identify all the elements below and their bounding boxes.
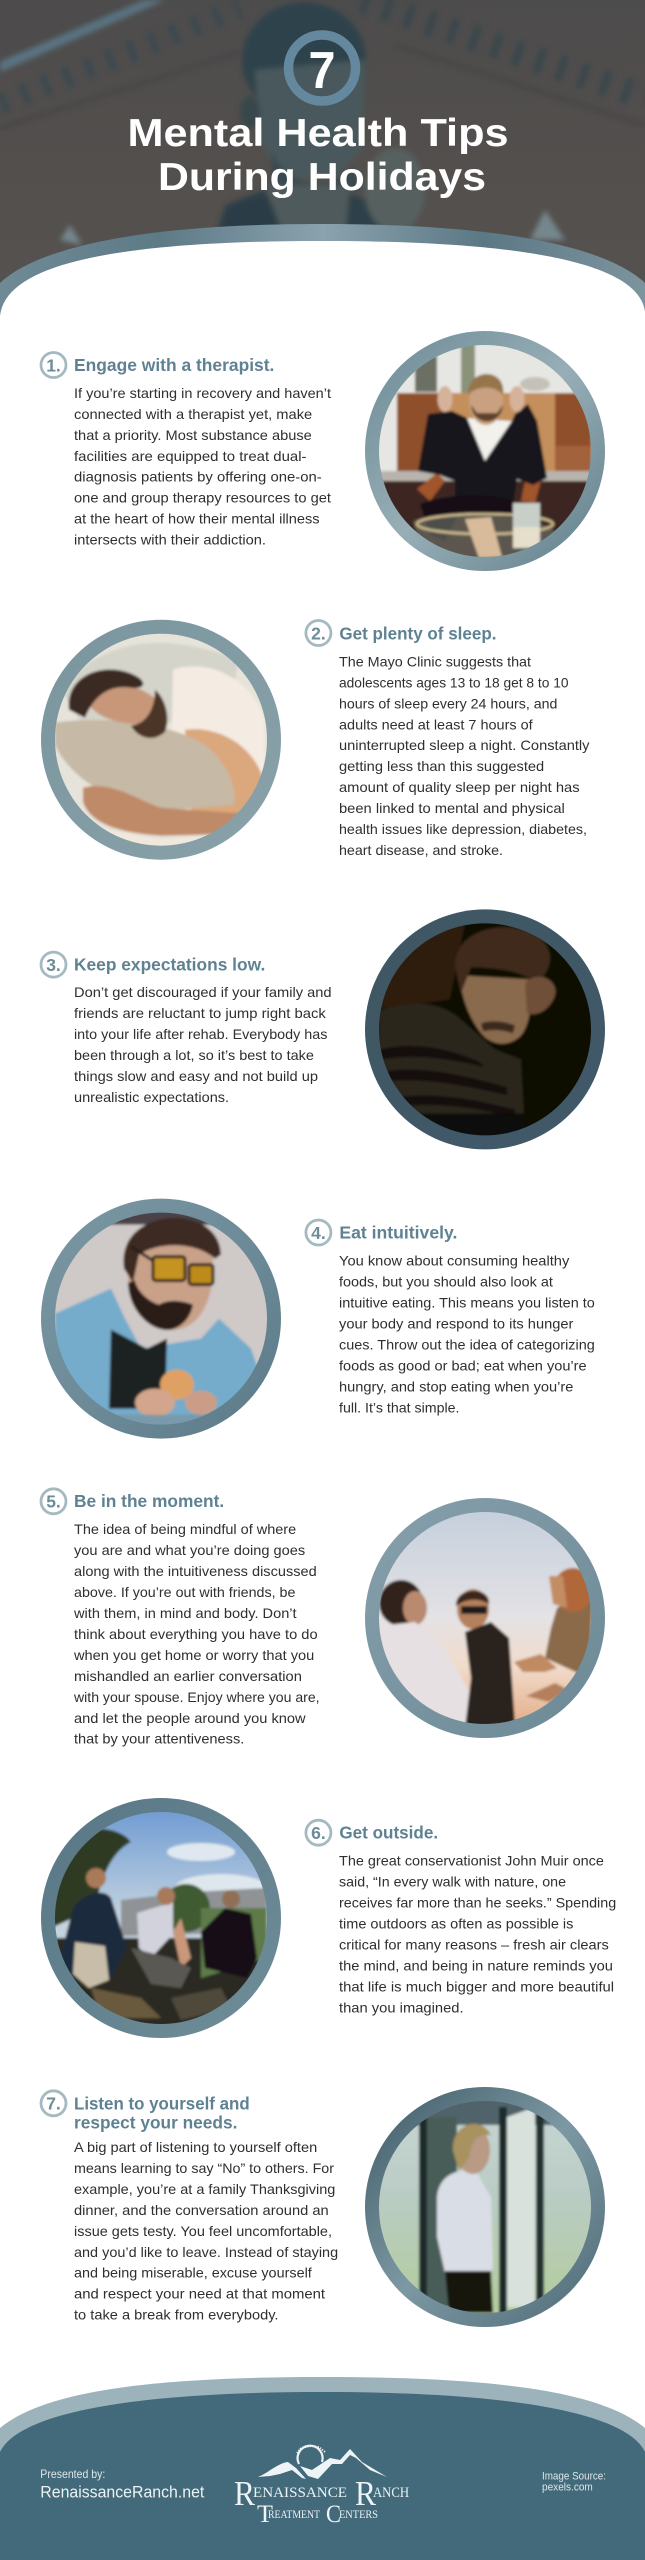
tip 4 body text xyxy=(339,1254,595,1415)
tip 7 body text: example, you’re at a family Thanksgiving xyxy=(74,2182,335,2197)
tip 2 body text: health issues like depression, diabetes, xyxy=(339,822,587,837)
tip 2 number badge xyxy=(306,620,331,646)
logo: Renaissance Ranch Treatment Centers: R xyxy=(234,2474,256,2513)
tip 7 body text: to take a break from everybody. xyxy=(74,2308,278,2323)
tip 4 body text: foods, but you should also look at xyxy=(339,1275,553,1290)
tip 6 body text: critical for many reasons – fresh air clears xyxy=(339,1937,609,1952)
tip 7 number badge xyxy=(41,2091,66,2116)
tip 2 body text: uninterrupted sleep a night. Constantly xyxy=(339,738,590,753)
tip 3 body text: Don’t get discouraged if your family and xyxy=(74,985,332,1000)
tip 4 heading: Eat intuitively. xyxy=(339,1223,457,1243)
tip 5 body text: that by your attentiveness. xyxy=(74,1732,244,1747)
title: Mental Health Tips xyxy=(128,112,508,155)
tip 7 body text: and respect your need at that moment xyxy=(74,2287,325,2302)
header number badge xyxy=(288,35,356,101)
logo: Renaissance Ranch Treatment Centers: C xyxy=(326,2501,341,2528)
tip 7 body text: and you’d like to leave. Instead of staying xyxy=(74,2245,338,2260)
tip 5 heading: Be in the moment. xyxy=(74,1491,224,1511)
tip 5 body text: think about everything you have to do xyxy=(74,1627,318,1642)
tip 3 xyxy=(41,909,605,1149)
tip 3 number badge: 3. xyxy=(46,955,61,975)
tip 4 body text: cues. Throw out the idea of categorizing xyxy=(339,1338,595,1352)
tip 4 body text: full. It’s that simple. xyxy=(339,1400,460,1415)
logo: Renaissance Ranch Treatment Centers xyxy=(234,2446,409,2528)
tip 2 heading: Get plenty of sleep. xyxy=(339,623,496,643)
tip 6 body text: said, “In every walk with nature, one xyxy=(339,1875,566,1890)
tip 1 body text: intersects with their addiction. xyxy=(74,533,266,548)
tip 7 body text: dinner, and the conversation around an xyxy=(74,2203,329,2218)
tip 2 body text: The Mayo Clinic suggests that xyxy=(339,654,531,669)
tip 1 heading: Engage with a therapist. xyxy=(74,355,274,375)
tip 7 xyxy=(41,2087,605,2327)
tip 6 body text: time outdoors as often as possible is xyxy=(339,1916,574,1932)
top arc band xyxy=(0,224,645,340)
tip 2 body text: getting less than this suggested xyxy=(339,759,544,774)
image source text xyxy=(542,2470,606,2494)
tip 1 body text: diagnosis patients by offering one-on- xyxy=(74,470,322,485)
presented by text xyxy=(40,2467,205,2501)
tip 5 body text: you are and what you’re doing goes xyxy=(74,1543,305,1558)
tip 4 photo: man with sunglasses eating xyxy=(41,1199,281,1439)
presented by text: RenaissanceRanch.net xyxy=(40,2482,205,2501)
tip 2 number badge: 2. xyxy=(311,623,326,643)
tip 1 body text xyxy=(74,386,331,548)
tip 5 body text: with them, in mind and body. Don’t xyxy=(73,1606,297,1621)
tip 3 number badge xyxy=(41,952,66,977)
tip 1 body text: If you’re starting in recovery and haven’t xyxy=(74,386,331,401)
tip 6 body text: the mind, and being in nature reminds you xyxy=(339,1958,613,1973)
tip 1 xyxy=(41,331,605,571)
tip 3 body text: friends are reluctant to jump right back xyxy=(74,1006,326,1021)
logo: Renaissance Ranch Treatment Centers: ENAISSANCE xyxy=(253,2485,347,2501)
tip 1 body text: connected with a therapist yet, make xyxy=(74,407,312,422)
logo: Renaissance Ranch Treatment Centers: ENTERS xyxy=(339,2507,378,2521)
logo: Renaissance Ranch Treatment Centers: REATMENT xyxy=(268,2507,321,2521)
tip 4 body text: hungry, and stop eating when you’re xyxy=(339,1379,573,1394)
tip 7 photo: man at window xyxy=(365,2087,605,2327)
tip 1 body text: at the heart of how their mental illness xyxy=(74,512,320,527)
tip 5 body text: when you get home or worry that you xyxy=(73,1648,314,1663)
title xyxy=(128,112,508,199)
tip 7 heading xyxy=(74,2093,250,2133)
tip 5 xyxy=(41,1489,605,1747)
tip 7 number badge: 7. xyxy=(46,2094,61,2114)
tip 2 body text: amount of quality sleep per night has xyxy=(339,780,580,795)
tip 3 body text: unrealistic expectations. xyxy=(74,1090,229,1105)
tip 1 photo: man gesturing in chair xyxy=(365,331,605,571)
tip 5 body text: mishandled an earlier conversation xyxy=(74,1669,302,1684)
tip 6 number badge: 6. xyxy=(311,1823,326,1843)
tip 6 body text xyxy=(339,1854,616,2015)
tip 4 body text: your body and respond to its hunger xyxy=(339,1317,574,1332)
tip 3 body text: into your life after rehab. Everybody has xyxy=(74,1027,328,1042)
header background photo xyxy=(0,0,645,340)
tip 3 photo: man with head in hand xyxy=(365,909,605,1149)
tip 4 body text: intuitive eating. This means you listen to xyxy=(339,1296,595,1311)
tip 2 xyxy=(41,620,590,860)
tip 5 body text: along with the intuitiveness discussed xyxy=(74,1564,317,1579)
tip 7 heading: Listen to yourself and xyxy=(74,2093,250,2113)
tip 2 body text: hours of sleep every 24 hours, and xyxy=(339,696,557,711)
tip 1 body text: facilities are equipped to treat dual- xyxy=(74,449,306,464)
header number badge: 7 xyxy=(308,42,336,100)
tip 6 heading: Get outside. xyxy=(339,1822,438,1842)
tip 6 body text: that life is much bigger and more beautiful xyxy=(339,1979,614,1994)
logo mountains and sun xyxy=(258,2446,387,2479)
tip 1 body text: that a priority. Most substance abuse xyxy=(74,428,312,443)
tip 7 body text: and being miserable, excuse yourself xyxy=(74,2266,312,2281)
tip 5 body text: The idea of being mindful of where xyxy=(74,1522,296,1537)
tip 7 body text: issue gets testy. You feel uncomfortable, xyxy=(74,2224,332,2239)
tip 5 number badge xyxy=(41,1489,66,1514)
tip 3 body text xyxy=(74,985,332,1105)
image source text: Image Source: xyxy=(542,2470,606,2482)
tip 5 number badge: 5. xyxy=(46,1492,61,1512)
tip 2 body text: heart disease, and stroke. xyxy=(339,843,503,858)
tip 1 number badge: 1. xyxy=(46,355,61,375)
tip 1 number badge xyxy=(41,352,66,378)
tip 6 body text: than you imagined. xyxy=(339,2000,464,2015)
tip 6 body text: The great conservationist John Muir once xyxy=(339,1854,604,1869)
footer arc band xyxy=(0,2377,645,2470)
tip 5 body text: with your spouse. Enjoy where you are, xyxy=(73,1690,320,1705)
tip 4 number badge: 4. xyxy=(311,1223,326,1243)
logo: Renaissance Ranch Treatment Centers: T xyxy=(257,2501,273,2528)
tip 6 photo: men sitting on rocks xyxy=(41,1798,281,2038)
title: During Holidays xyxy=(158,156,486,199)
tip 7 body text: A big part of listening to yourself often xyxy=(74,2140,317,2155)
tip 5 body text: above. If you’re out with friends, be xyxy=(74,1585,295,1600)
tip 5 body text: and let the people around you know xyxy=(74,1711,306,1726)
tip 7 body text: means learning to say “No” to others. For xyxy=(74,2161,334,2176)
tip 5 photo: three friends talking xyxy=(365,1498,605,1738)
logo: Renaissance Ranch Treatment Centers: R xyxy=(355,2474,377,2513)
tip 3 heading: Keep expectations low. xyxy=(74,955,265,975)
tip 4 body text: You know about consuming healthy xyxy=(339,1254,570,1269)
tip 2 body text: adolescents ages 13 to 18 get 8 to 10 xyxy=(339,675,569,690)
tip 4 xyxy=(41,1199,595,1439)
tip 5 body text xyxy=(73,1522,320,1747)
tip 7 body text xyxy=(74,2140,338,2323)
image source text: pexels.com xyxy=(542,2482,593,2494)
tip 4 number badge xyxy=(306,1220,331,1245)
tip 2 body text xyxy=(339,654,590,858)
tip 2 photo: man sleeping on pillow xyxy=(41,620,281,860)
tip 7 heading: respect your needs. xyxy=(74,2113,237,2133)
tip 3 body text: been through a lot, so it’s best to take xyxy=(74,1048,314,1063)
logo: Renaissance Ranch Treatment Centers: ANCH xyxy=(373,2485,409,2501)
tip 2 body text: been linked to mental and physical xyxy=(339,801,565,816)
tip 3 body text: things slow and easy and not build up xyxy=(74,1069,318,1084)
tip 4 body text: foods as good or bad; eat when you’re xyxy=(339,1358,587,1374)
tip 6 xyxy=(41,1798,616,2038)
presented by text: Presented by: xyxy=(40,2467,105,2481)
tip 1 body text: one and group therapy resources to get xyxy=(74,491,331,506)
footer panel xyxy=(0,2392,645,2560)
tip 6 body text: receives far more than he seeks.” Spending xyxy=(339,1896,616,1910)
tip 2 body text: adults need at least 7 hours of xyxy=(339,717,533,732)
tip 6 number badge xyxy=(306,1820,331,1845)
